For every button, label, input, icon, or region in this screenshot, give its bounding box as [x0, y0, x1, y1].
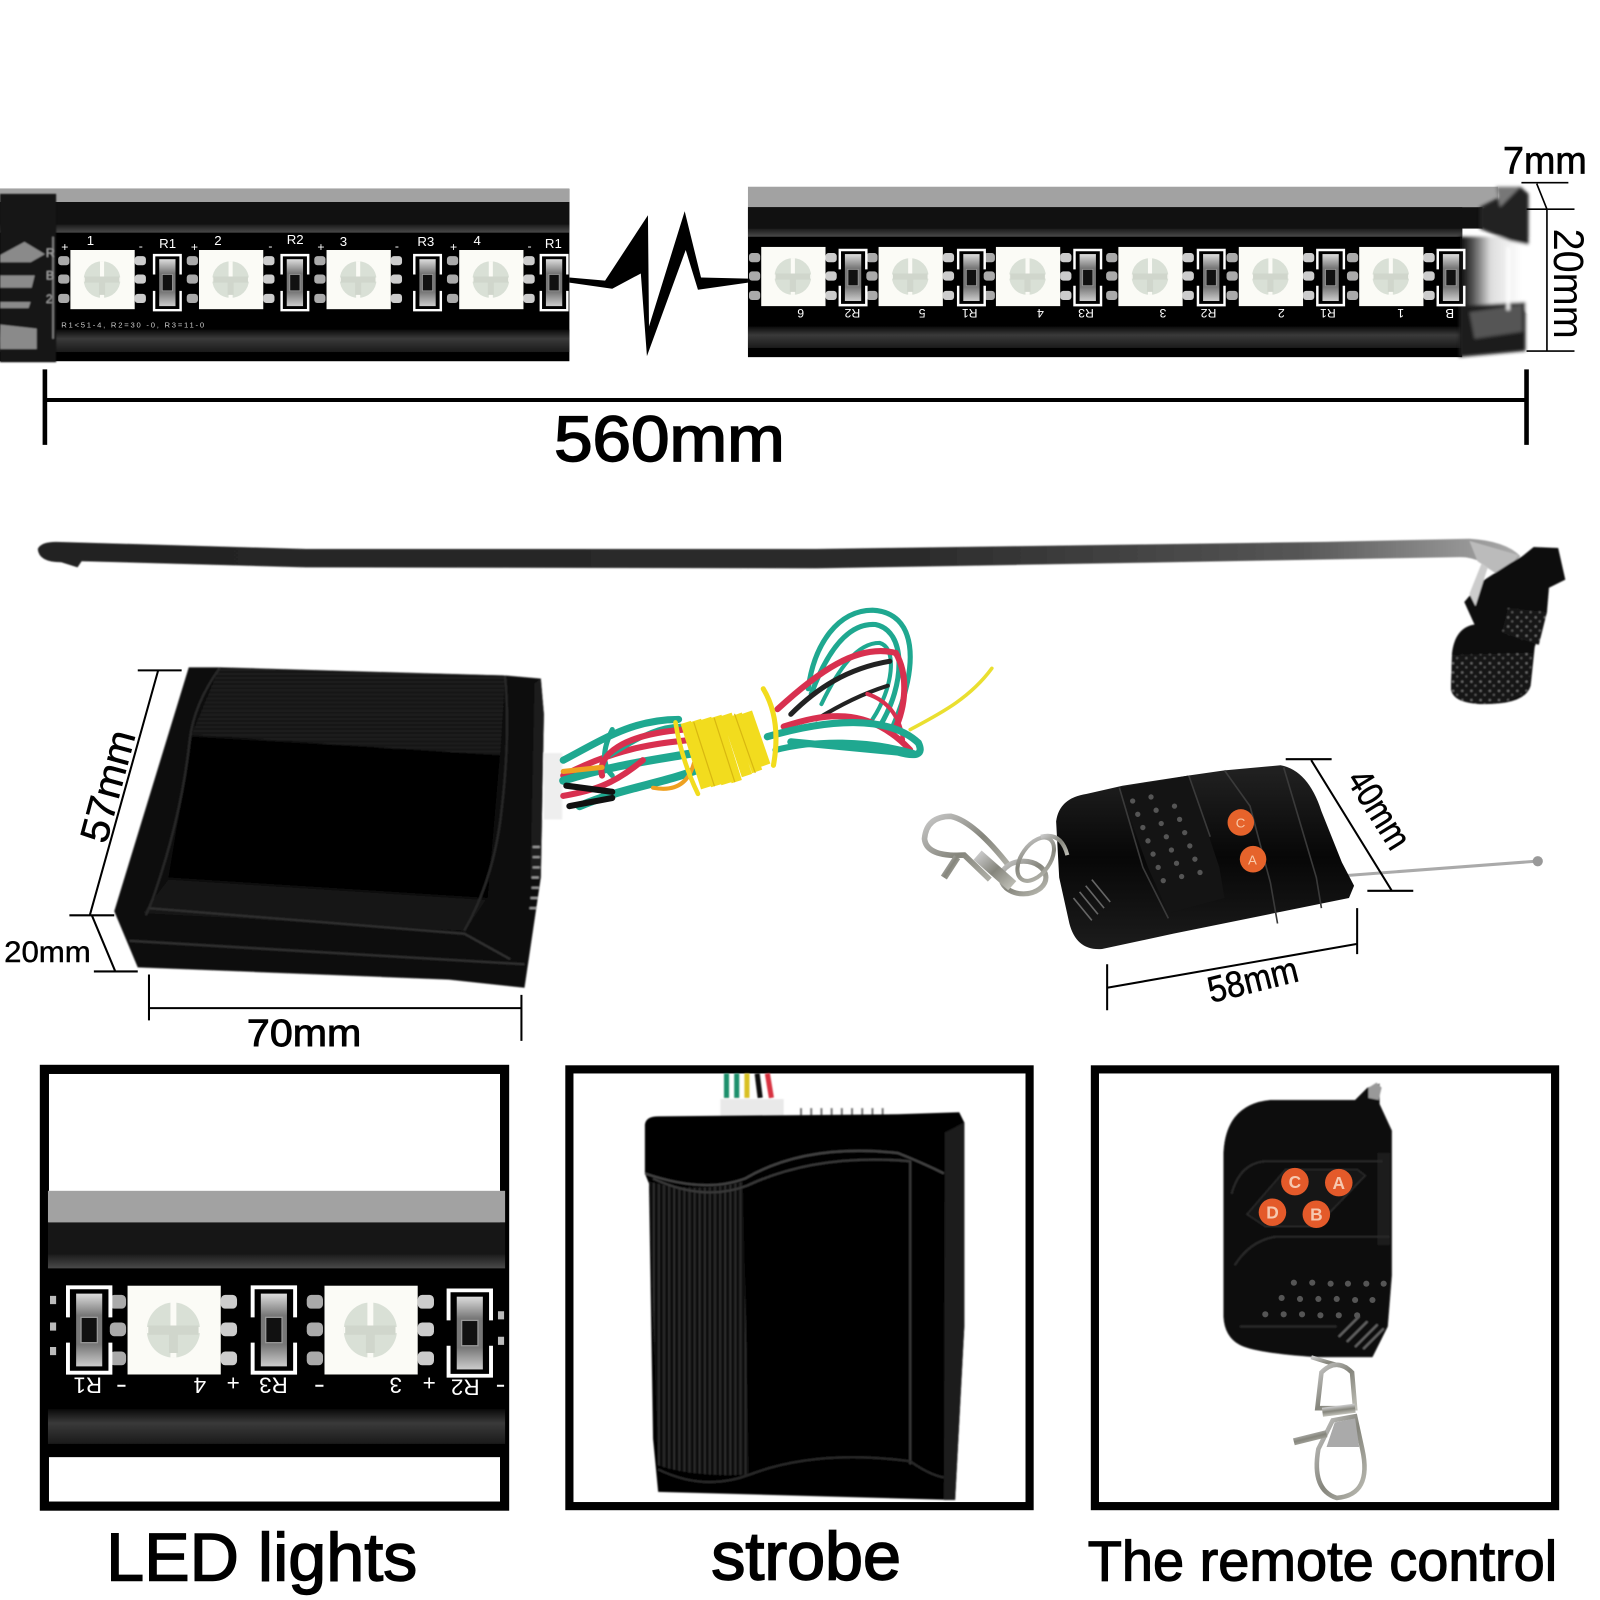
dimension: 20mm strip width: 20mm [1544, 229, 1592, 339]
icon: antenna [1347, 861, 1536, 876]
upside-down component labels on right strip: 2 [1278, 306, 1285, 320]
upside-down labels close-up: + [423, 1371, 436, 1396]
panel: remote control close-up [1095, 1069, 1555, 1506]
component labels on left strip: R3 [417, 234, 434, 249]
upside-down component labels on right strip: 4 [1037, 306, 1044, 320]
icon: break zigzag between strip segments [569, 211, 748, 356]
icon: coiled ribbon cable [1451, 547, 1565, 704]
component labels on left strip [61, 232, 562, 330]
remote buttons A B C D [1259, 1168, 1353, 1228]
component labels on left strip: R1 [159, 236, 176, 251]
dimension: 7mm thickness: 7mm [1503, 139, 1587, 181]
upside-down labels close-up: R2 [451, 1375, 480, 1400]
upside-down component labels on right strip: R1 [962, 306, 978, 320]
component labels on left strip: - [139, 239, 143, 253]
dimension: 57mm box depth: 57mm [72, 725, 144, 847]
dimension: 70mm box width [149, 974, 521, 1054]
dimension: 40mm remote width: 40mm [1339, 762, 1419, 857]
dimension: 7mm thickness [1503, 139, 1587, 209]
component labels on left strip: 1 [87, 233, 94, 248]
component labels on left strip: R1<51-4, R2=30 -0, R3=11-0 [61, 321, 204, 330]
component labels on left strip: + [191, 240, 198, 254]
upside-down labels close-up: R3 [259, 1373, 288, 1398]
icon: coloured wire bundle [563, 610, 992, 806]
dimension: 560mm length [45, 369, 1527, 475]
dimension: 58mm remote length [1107, 908, 1357, 1011]
LEDs on left strip [58, 250, 567, 310]
caption: LED lights: LED lights [106, 1521, 417, 1596]
upside-down component labels on right strip: 5 [919, 306, 926, 320]
photo: strobe controller box [114, 667, 562, 988]
panel: right segment of LED strip [748, 187, 1529, 357]
icon: connector end with wires [0, 194, 56, 362]
upside-down labels close-up: 4 [194, 1373, 206, 1398]
remote speaker dots [1262, 1280, 1387, 1318]
icon: connector end with wires: B [46, 269, 54, 283]
upside-down component labels on right strip: R2 [1200, 306, 1216, 320]
dimension: 58mm remote length: 58mm [1203, 949, 1302, 1011]
upside-down component labels on right strip: B [1445, 306, 1454, 321]
upside-down labels close-up: R1 [73, 1373, 102, 1398]
upside-down component labels on right strip: R3 [1078, 306, 1094, 320]
upside-down labels close-up: 3 [390, 1373, 402, 1398]
dimension: 70mm box width: 70mm [247, 1012, 361, 1054]
upside-down component labels on right strip: 1 [1397, 306, 1404, 320]
panel: left segment of LED strip [0, 189, 569, 362]
remote buttons A B C D: A [1333, 1173, 1346, 1193]
upside-down component labels on right strip: R1 [1320, 306, 1336, 320]
dimension: 57mm box depth [69, 670, 182, 915]
component labels on left strip: - [268, 239, 272, 253]
dimension: 20mm strip width [1527, 209, 1592, 351]
photo: remote control with antenna [924, 765, 1543, 949]
panel: LED lights close-up [44, 1069, 505, 1506]
component labels on left strip: + [317, 240, 325, 254]
remote buttons [1228, 809, 1266, 872]
upside-down component labels on right strip: R2 [844, 306, 860, 320]
remote body [1223, 1083, 1392, 1357]
upside-down component labels on right strip [797, 306, 1454, 321]
icon: key clasp [1294, 1357, 1365, 1498]
icon: connector wires [720, 1073, 883, 1117]
dimension: 20mm box height [4, 915, 138, 971]
dimension: 40mm remote width [1286, 759, 1419, 891]
icon: connector end with wires: 2 [46, 292, 53, 306]
remote buttons: A [1248, 852, 1257, 867]
LEDs close-up [50, 1286, 504, 1376]
remote buttons A B C D: D [1266, 1202, 1279, 1222]
remote buttons A B C D: B [1310, 1204, 1323, 1224]
remote buttons: C [1236, 816, 1246, 831]
upside-down labels close-up [73, 1371, 504, 1400]
dimension: 560mm length: 560mm [554, 403, 785, 475]
LEDs on right strip [749, 247, 1464, 306]
icon: connector pins on box edge [530, 847, 540, 908]
caption: strobe: strobe [711, 1520, 901, 1595]
upside-down labels close-up: + [227, 1371, 240, 1396]
component labels on left strip: R2 [287, 232, 304, 247]
component labels on left strip: + [450, 240, 457, 254]
component labels on left strip: - [528, 239, 532, 253]
component labels on left strip: 4 [473, 233, 481, 248]
upside-down component labels on right strip: 6 [797, 306, 804, 320]
upside-down component labels on right strip: 3 [1159, 306, 1166, 320]
remote buttons A B C D: C [1289, 1172, 1302, 1192]
icon: yellow wire coil [676, 689, 776, 794]
icon: key clasp [924, 816, 1067, 894]
caption: The remote control: The remote control [1088, 1530, 1557, 1593]
component labels on left strip: 3 [340, 234, 347, 249]
icon: connector end with wires: R [46, 246, 55, 260]
box body [645, 1112, 964, 1500]
dimension: 20mm box height: 20mm [4, 936, 91, 969]
component labels on left strip: 2 [214, 233, 222, 248]
photo: full LED strip rod with coiled cable [38, 539, 1565, 704]
remote speaker dots [1130, 794, 1203, 883]
panel: strobe close-up [569, 1069, 1030, 1506]
strip open end cap [1459, 187, 1529, 357]
component labels on left strip: - [395, 239, 399, 253]
component labels on left strip: + [61, 240, 68, 254]
component labels on left strip: R1 [545, 236, 562, 251]
